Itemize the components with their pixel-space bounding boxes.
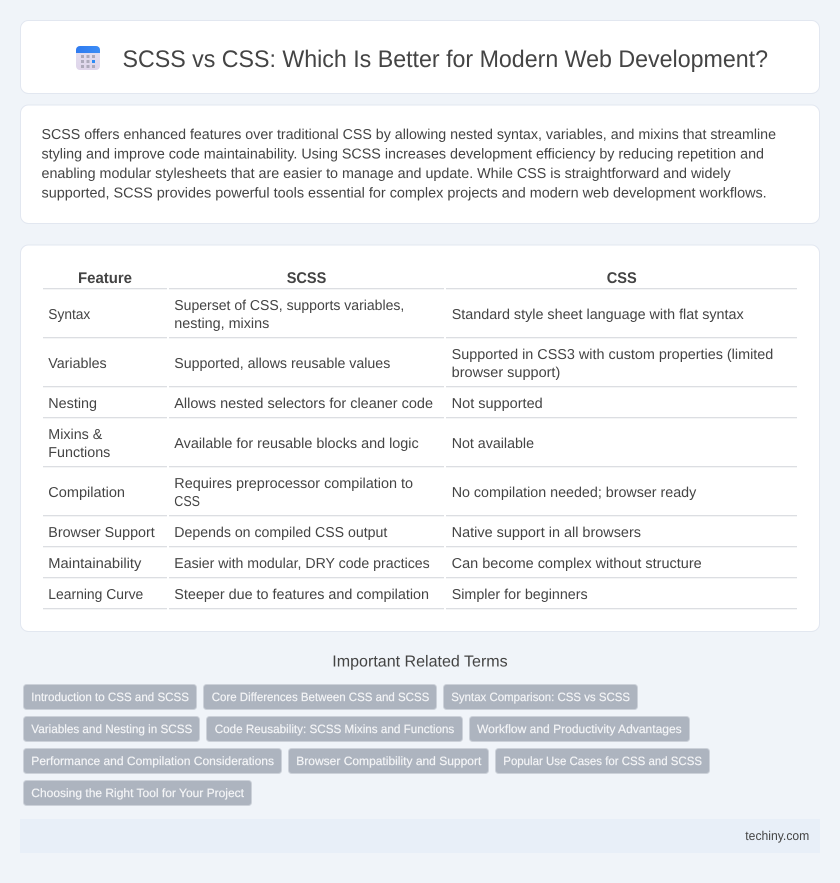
tag	[204, 684, 436, 710]
tag	[24, 684, 196, 710]
intro paragraph: supported, SCSS provides powerful tools essential for complex projects and modern web development workflows.	[42, 186, 767, 202]
row: browser support: Depends on compiled CSS output	[174, 525, 387, 541]
panel: comparison table	[20, 245, 820, 632]
table header row: Feature	[78, 270, 132, 287]
row: maintainability: Easier with modular, DRY code practices	[174, 556, 430, 572]
tag: Variables and Nesting in SCSS	[31, 722, 192, 736]
row: syntax: Syntax	[48, 307, 91, 323]
tag: Core Differences Between CSS and SCSS	[212, 690, 429, 704]
row: nesting: Allows nested selectors for cleaner code	[174, 396, 433, 412]
tag	[24, 780, 252, 806]
row: variables	[48, 347, 773, 381]
table header row	[78, 270, 637, 287]
row: mixins and functions	[48, 427, 534, 461]
tag	[24, 716, 200, 742]
heading: important related terms: Important Related Terms	[332, 654, 508, 671]
intro paragraph: styling and improve code maintainability. Using SCSS increases development efficiency by reducing repetition and	[42, 146, 764, 162]
panel: header	[20, 20, 820, 94]
row: compilation: Requires preprocessor compilation to	[174, 476, 413, 492]
row: compilation: CSS	[174, 494, 200, 510]
row: compilation: No compilation needed; browser ready	[452, 485, 697, 501]
row: compilation: Compilation	[48, 485, 125, 501]
row: variables: Supported, allows reusable values	[174, 356, 390, 372]
tag: Syntax Comparison: CSS vs SCSS	[451, 690, 630, 704]
tag: Browser Compatibility and Support	[296, 754, 482, 768]
row: syntax: nesting, mixins	[174, 316, 269, 332]
row: maintainability: Maintainability	[48, 556, 142, 572]
tag	[206, 716, 462, 742]
row: mixins and functions: Available for reusable blocks and logic	[174, 436, 419, 452]
row: nesting	[48, 396, 543, 412]
table header row: CSS	[607, 270, 637, 287]
footer credit: techiny.com	[745, 828, 809, 843]
tag	[470, 716, 690, 742]
row: maintainability	[48, 556, 702, 572]
panel: related term tags	[24, 684, 710, 806]
panel: introduction	[20, 105, 820, 224]
row: learning curve	[48, 587, 588, 603]
row: maintainability: Can become complex without structure	[452, 556, 702, 572]
row: variables: Supported in CSS3 with custom properties (limited	[452, 347, 773, 363]
footer	[20, 819, 820, 853]
row: mixins and functions: Functions	[48, 445, 110, 461]
row: syntax	[48, 298, 744, 332]
icon: calendar	[76, 46, 100, 70]
row: mixins and functions: Mixins &	[48, 427, 103, 443]
table header row: SCSS	[287, 270, 326, 287]
tag: Code Reusability: SCSS Mixins and Functions	[215, 722, 454, 736]
intro paragraph: SCSS offers enhanced features over traditional CSS by allowing nested syntax, variables, and mixins that streamline	[42, 127, 776, 143]
row: browser support	[48, 525, 641, 541]
tag: Workflow and Productivity Advantages	[477, 722, 682, 736]
row: nesting: Not supported	[452, 396, 543, 412]
row: variables: Variables	[48, 356, 107, 372]
tag	[444, 684, 638, 710]
tag: Popular Use Cases for CSS and SCSS	[503, 754, 702, 768]
row: syntax: Superset of CSS, supports variables,	[174, 298, 404, 314]
row: learning curve: Steeper due to features and compilation	[174, 587, 429, 603]
tag: Choosing the Right Tool for Your Project	[31, 786, 245, 800]
tag	[288, 748, 488, 774]
title: SCSS vs CSS: Which Is Better for Modern Web Development?	[122, 46, 768, 73]
intro paragraph	[42, 127, 776, 202]
row: learning curve: Learning Curve	[48, 587, 143, 603]
tag	[496, 748, 710, 774]
row: browser support: Browser Support	[48, 525, 155, 541]
tag	[24, 748, 282, 774]
row: learning curve: Simpler for beginners	[452, 587, 588, 603]
row: syntax: Standard style sheet language with flat syntax	[452, 307, 744, 323]
intro paragraph: enabling modular stylesheets that are easier to manage and update. While CSS is straightforward and widely	[42, 166, 731, 182]
row: variables: browser support)	[452, 365, 560, 381]
tag: Introduction to CSS and SCSS	[31, 690, 189, 704]
tag: Performance and Compilation Considerations	[31, 754, 274, 768]
row: mixins and functions: Not available	[452, 436, 534, 452]
row: nesting: Nesting	[48, 396, 97, 412]
row: browser support: Native support in all browsers	[452, 525, 641, 541]
row: compilation	[48, 476, 697, 510]
